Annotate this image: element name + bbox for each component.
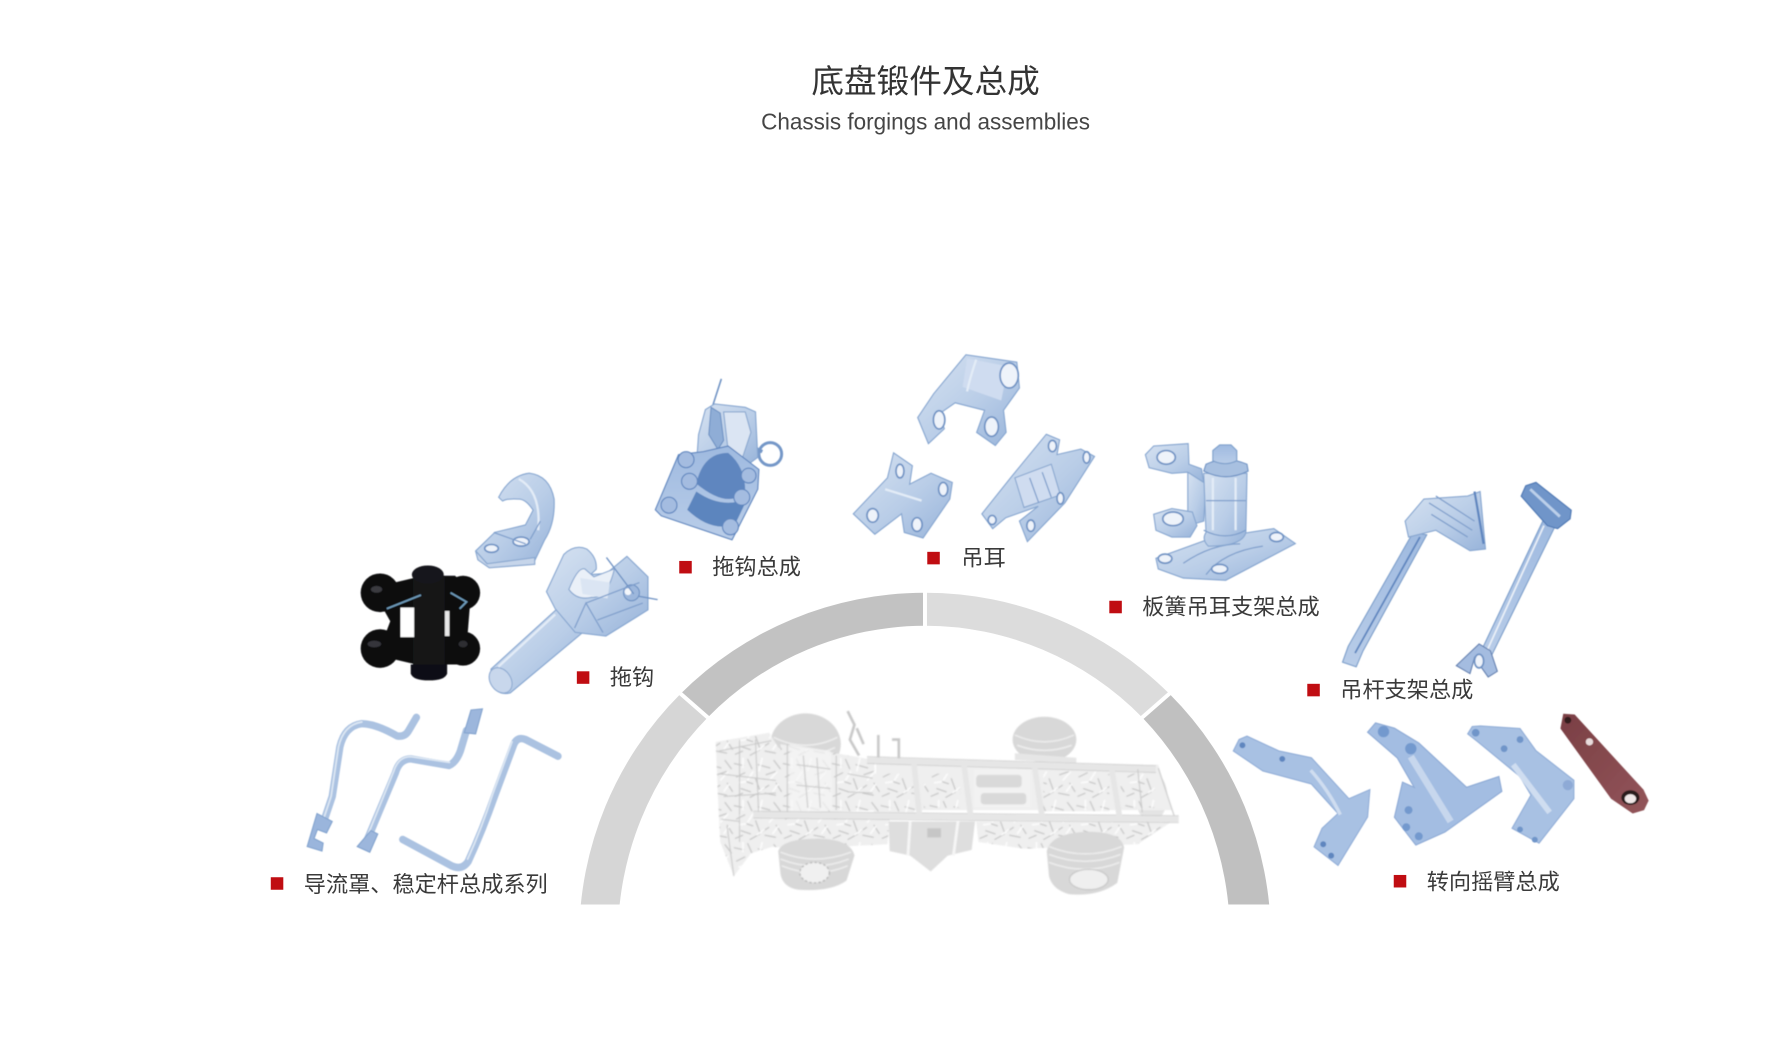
label: hanger rod bracket assembly: 吊杆支架总成 [1340, 677, 1473, 702]
subtitle: Chassis forgings and assemblies [761, 109, 1090, 135]
icon: tow hook assembly [655, 379, 782, 540]
frame rails and cross members [753, 757, 1179, 823]
label: steering arm assembly: 转向摇臂总成 [1427, 870, 1560, 895]
front engine and cab mounts [716, 733, 780, 876]
icon: top shackle lug [918, 355, 1019, 445]
lower left wheel [778, 839, 854, 890]
icon: hanger rod bracket left [1343, 492, 1485, 667]
label: leaf spring shackle bracket assembly: 板簧吊耳支架总成 [1142, 594, 1320, 619]
icon: black shackle [361, 565, 480, 680]
bar 3 [403, 739, 558, 867]
upper left wheel [770, 713, 841, 775]
chassis illustration [716, 711, 1179, 895]
icon: hanger rod bracket right [1456, 482, 1571, 677]
icon: lower left lug [853, 453, 952, 538]
icon: tow hook [484, 547, 658, 697]
label: tow hook [577, 665, 654, 690]
icon: tow hook claw [476, 473, 554, 568]
label: deflector and stabilizer bars: 导流罩、稳定杆总成系列 [304, 872, 548, 897]
fuel tank [889, 821, 975, 872]
icon: leaf spring bracket [1145, 444, 1295, 580]
title [761, 63, 1090, 135]
title: 底盘锻件及总成 [811, 63, 1040, 100]
label: tow hook: 拖钩 [610, 665, 654, 690]
engine block [780, 711, 899, 815]
icon: deflector and stabilizer bars [307, 709, 558, 867]
undercarriage [740, 815, 1172, 849]
parts group [307, 355, 1649, 867]
icon: steering arm three [1468, 726, 1574, 843]
icon: red steering arm [1560, 714, 1649, 814]
bar 2 [357, 709, 482, 852]
infographic canvas [270, 64, 1650, 904]
label: shackle lug [927, 545, 1006, 570]
icon: steering arm two [1368, 723, 1502, 845]
semicircle segmented arc [580, 592, 1270, 904]
icon: lower right lug [982, 434, 1095, 542]
rear wheel behind frame [1135, 771, 1167, 821]
lower right wheel [1047, 832, 1124, 895]
label: tow hook assembly: 拖钩总成 [712, 555, 801, 580]
upper right wheel [1013, 717, 1076, 763]
icon: steering arm one [1233, 736, 1370, 865]
bar 1 [307, 717, 416, 851]
label: shackle lug: 吊耳 [961, 545, 1006, 570]
